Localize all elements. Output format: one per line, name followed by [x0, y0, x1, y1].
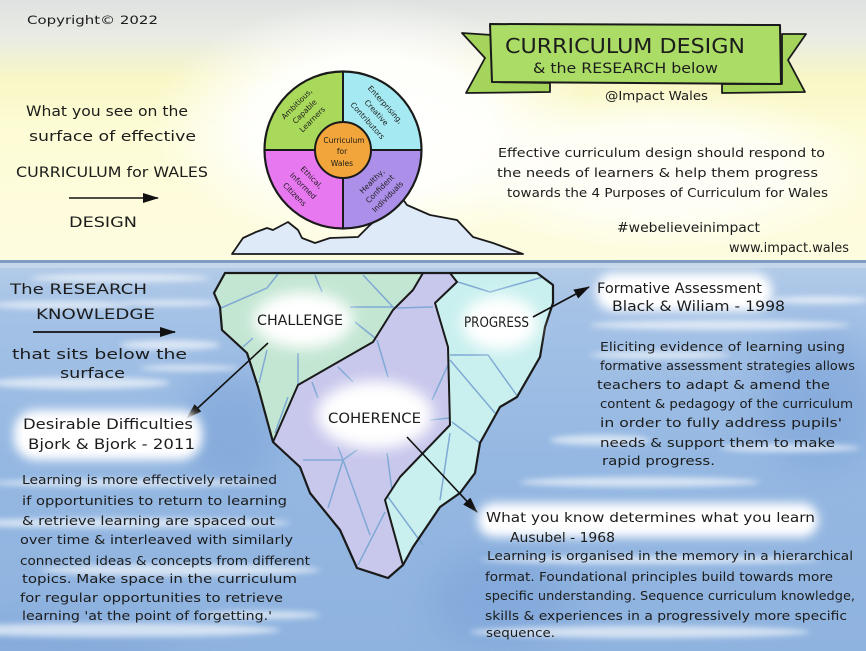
title banner: @Impact Wales: [605, 89, 708, 103]
heading: what you see on the surface: surface of effective: [29, 129, 196, 145]
text block: formative assessment: in order to fully address pupils': [600, 415, 842, 430]
text block: formative assessment: Formative Assessment: [597, 281, 763, 297]
label: ambitious capable learners: Learners: [298, 105, 327, 134]
text block: what you know: What you know determines what you learn: [486, 510, 815, 526]
text block: formative assessment: content & pedagogy of the curriculum: [600, 396, 853, 411]
summary text: the needs of learners & help them progress: [497, 165, 818, 180]
label: centre: for: [337, 147, 348, 156]
sky background: [0, 0, 866, 262]
text block: what you know: skills & experiences in a progressively more specific: [485, 608, 847, 623]
summary text: [497, 145, 828, 200]
crack lines: [221, 274, 543, 565]
text block: desirable difficulties: over time & interleaved with similarly: [20, 532, 294, 547]
text block: formative assessment: Eliciting evidence of learning using: [600, 339, 845, 354]
text block: desirable difficulties: Bjork & Bjork - 2011: [28, 437, 195, 453]
label: progress: PROGRESS: [464, 315, 529, 331]
text block: what you know: Ausubel - 1968: [510, 531, 615, 546]
section: challenge: [214, 273, 423, 442]
label: healthy confident individuals: Confident: [364, 173, 396, 205]
copyright note: Copyright© 2022: [27, 13, 158, 27]
label: ambitious capable learners: [280, 87, 330, 137]
text block: formative assessment: [596, 273, 855, 468]
text block: what you know: Learning is organised in the memory in a hierarchical: [487, 548, 853, 563]
text block: what you know: format. Foundational principles build towards more: [485, 569, 833, 584]
research knowledge heading: The RESEARCH: [9, 282, 147, 298]
section: progress: [385, 273, 553, 565]
label: enterprising creative contributors: Contributors: [348, 100, 386, 141]
research knowledge heading: surface: [60, 366, 125, 382]
label: challenge: CHALLENGE: [257, 313, 343, 329]
research knowledge heading: that sits below the: [12, 347, 187, 363]
hashtag and website: [617, 221, 849, 256]
hashtag and website: www.impact.wales: [729, 241, 849, 256]
label: coherence: COHERENCE: [328, 411, 421, 427]
section: coherence: [273, 273, 457, 578]
research knowledge heading: KNOWLEDGE: [36, 307, 155, 323]
text block: what you know: [478, 503, 855, 640]
title banner: [462, 24, 806, 103]
text block: desirable difficulties: topics. Make space in the curriculum: [22, 571, 297, 586]
text block: what you know: specific understanding. Sequence curriculum knowledge,: [485, 588, 855, 603]
text block: desirable difficulties: if opportunities to return to learning: [22, 493, 287, 508]
text block: desirable difficulties: Learning is more effectively retained: [22, 472, 277, 487]
label: healthy confident individuals: Individuals: [370, 179, 405, 214]
text block: formative assessment: Black & Wiliam - 1998: [612, 299, 785, 315]
text block: what you know: sequence.: [486, 625, 555, 640]
label: healthy confident individuals: [355, 164, 405, 214]
label: enterprising creative contributors: Enterprising,: [366, 84, 405, 125]
glow behind labels: [253, 292, 538, 449]
text block: formative assessment: rapid progress.: [602, 453, 715, 468]
text block: desirable difficulties: connected ideas & concepts from different: [20, 553, 310, 568]
label: ethical informed citizens: Informed: [288, 171, 318, 201]
arrow: progress to formative assessment: [533, 287, 589, 317]
summary text: Effective curriculum design should respond to: [498, 145, 825, 160]
heading: what you see on the surface: CURRICULUM for WALES: [16, 165, 208, 181]
heading: what you see on the surface: What you see on the: [26, 104, 188, 120]
small iceberg tip: [232, 198, 523, 254]
label: centre: Wales: [331, 159, 353, 168]
arrow: coherence to Ausubel: [407, 437, 477, 512]
title banner: CURRICULUM DESIGN: [505, 34, 745, 58]
label: ethical informed citizens: [279, 162, 327, 210]
heading: what you see on the surface: DESIGN: [69, 215, 137, 231]
text block: formative assessment: teachers to adapt & amend the: [597, 377, 830, 392]
heading: what you see on the surface: [16, 104, 208, 231]
text block: desirable difficulties: [14, 410, 310, 623]
label: healthy confident individuals: Healthy,: [358, 167, 386, 195]
submerged iceberg: [214, 273, 553, 578]
outline: [214, 273, 553, 578]
text block: desirable difficulties: Desirable Difficulties: [23, 417, 193, 433]
label: enterprising creative contributors: [348, 84, 405, 142]
label: ambitious capable learners: Capable: [291, 97, 319, 126]
sea background: [0, 260, 866, 651]
text block: desirable difficulties: learning 'at the point of forgetting.': [22, 608, 272, 623]
research knowledge heading: [9, 282, 187, 382]
purposes wheel: [264, 72, 422, 228]
label: ethical informed citizens: Ethical,: [299, 164, 325, 190]
arrow: challenge to desirable difficulties: [187, 343, 268, 418]
label: enterprising creative contributors: Creative: [363, 98, 390, 128]
text block: formative assessment: formative assessment strategies allows: [600, 358, 855, 373]
text block: desirable difficulties: for regular opportunities to retrieve: [20, 590, 283, 605]
summary text: towards the 4 Purposes of Curriculum for Wales: [507, 185, 828, 200]
hashtag and website: #webelieveinimpact: [617, 221, 760, 236]
text block: formative assessment: needs & support them to make: [600, 435, 835, 450]
label: ethical informed citizens: Citizens: [281, 181, 308, 208]
label: centre: Curriculum: [323, 136, 365, 145]
title banner: & the RESEARCH below: [533, 61, 718, 77]
label: ambitious capable learners: Ambitious,: [280, 87, 314, 121]
text block: desirable difficulties: & retrieve learning are spaced out: [22, 513, 275, 528]
label: centre: [323, 136, 365, 168]
